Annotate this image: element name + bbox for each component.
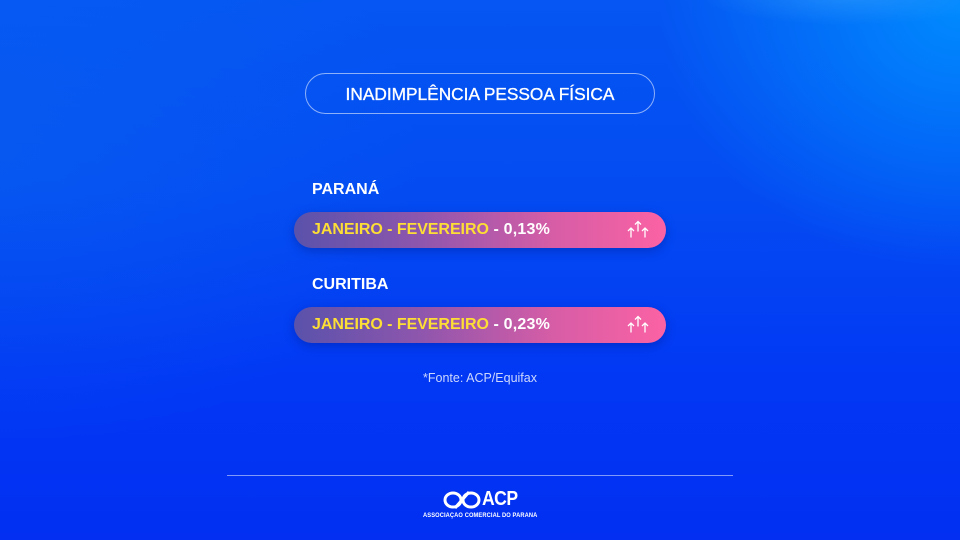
bar: Paraná: JANEIRO - FEVEREIRO - 0,13% (312, 221, 550, 238)
source note: *Fonte: ACP/Equifax (423, 371, 537, 385)
title pill (305, 73, 655, 114)
bar: Curitiba: JANEIRO - FEVEREIRO - 0,23% (312, 316, 550, 333)
logo wordmark: ACP (482, 488, 518, 510)
bar: Paraná (294, 212, 666, 248)
footer divider (227, 475, 733, 476)
logo symbol (444, 491, 480, 509)
logo: ACP (423, 488, 538, 519)
heading: Curitiba: CURITIBA (312, 276, 388, 293)
heading: Paraná: PARANÁ (312, 181, 379, 198)
title pill: INADIMPLÊNCIA PESSOA FÍSICA (346, 84, 614, 104)
logo tagline: ASSOCIAÇÃO COMERCIAL DO PARANÁ (423, 513, 537, 519)
bar: Curitiba (294, 307, 666, 343)
